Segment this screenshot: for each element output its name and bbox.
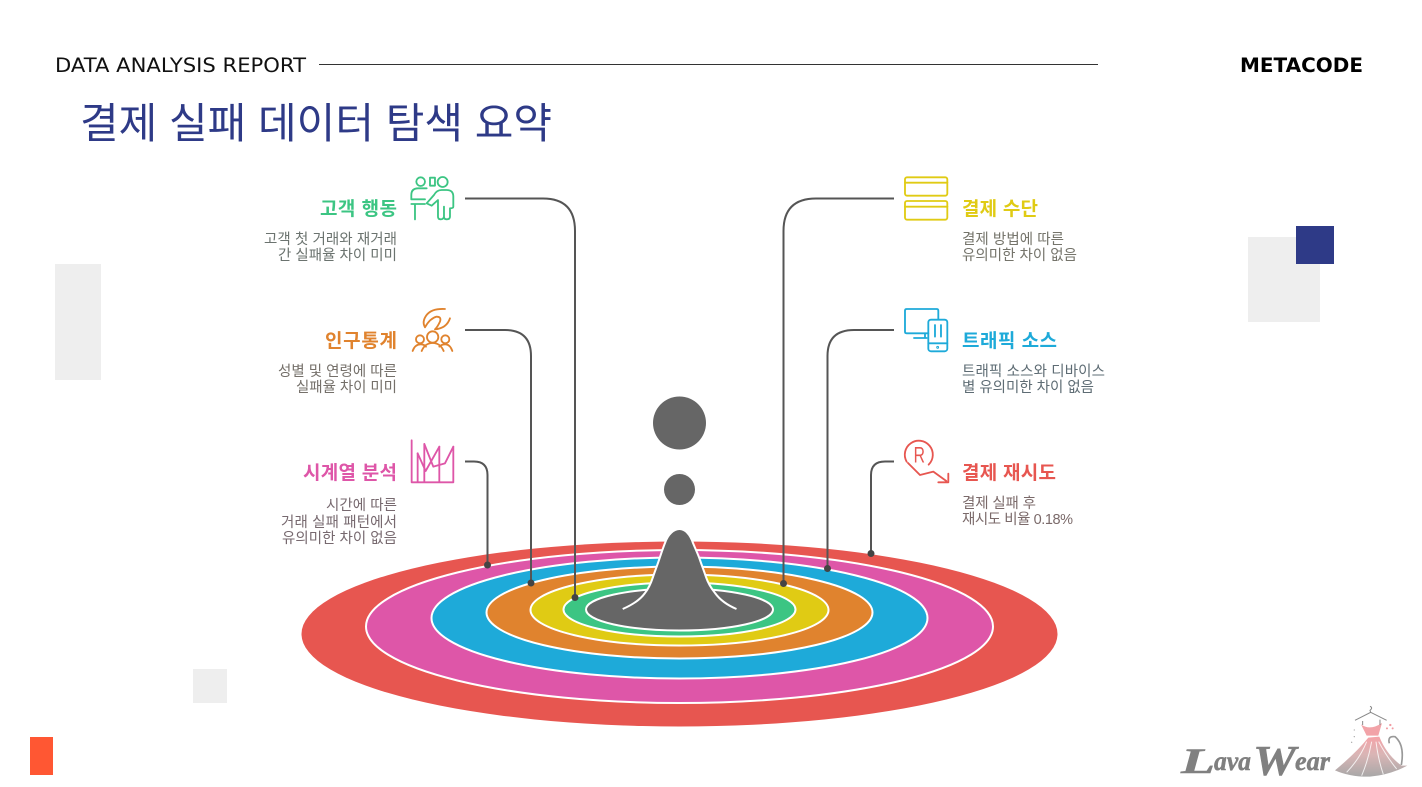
- decorative block: orange: [30, 737, 53, 775]
- title: 결제 실패 데이터 탐색 요약: [80, 100, 552, 147]
- description: 실패율 차이 미미: [296, 379, 397, 396]
- icon: line chart: [412, 440, 453, 482]
- description: 트래픽 소스와 디바이스: [962, 363, 1105, 380]
- concentric rings chart: [302, 542, 1058, 726]
- icon: retry arrow: R: [914, 442, 925, 467]
- logo wordmark: W: [1253, 739, 1299, 785]
- description: 거래 실패 패턴에서: [281, 514, 397, 531]
- description: [962, 363, 1105, 396]
- item: traffic source: [905, 309, 1105, 396]
- description: 유의미한 차이 없음: [282, 530, 397, 547]
- description: 성별 및 연령에 따른: [278, 363, 397, 380]
- item: time series: [281, 440, 453, 547]
- decorative block: left gray: [55, 264, 101, 380]
- description: 결제 방법에 따른: [962, 231, 1064, 248]
- header label: DATA ANALYSIS REPORT: [55, 54, 306, 77]
- logo: LavaWear: [1179, 706, 1407, 785]
- connector: payment retry: [868, 462, 894, 557]
- connector: traffic source: [824, 330, 894, 572]
- description: 별 유의미한 차이 없음: [962, 379, 1094, 396]
- small drop: [664, 474, 695, 505]
- description: 재시도 비율 0.18%: [962, 511, 1073, 528]
- description: 시간에 따른: [326, 497, 397, 514]
- central bell peak: [623, 529, 736, 625]
- description: [281, 497, 397, 547]
- item: customer behavior: [264, 177, 453, 264]
- decorative block: navy: [1296, 226, 1334, 264]
- description: 유의미한 차이 없음: [962, 247, 1077, 264]
- description: [278, 363, 397, 396]
- description: [962, 231, 1077, 264]
- icon: people group: [413, 309, 452, 351]
- connector: customer behavior: [465, 198, 578, 601]
- brand name: METACODE: [1240, 54, 1363, 77]
- heading: 트래픽 소스: [962, 330, 1057, 352]
- heading: 시계열 분석: [303, 462, 397, 484]
- logo wordmark: ear: [1295, 746, 1330, 776]
- description: 간 실패율 차이 미미: [278, 247, 397, 264]
- icon: cards: [905, 177, 947, 220]
- description: [962, 495, 1073, 528]
- decorative block: small gray: [193, 669, 227, 703]
- decorative block: right gray: [1248, 237, 1320, 322]
- connector: time series: [465, 462, 491, 568]
- description: 결제 실패 후: [962, 495, 1036, 512]
- description: [264, 231, 397, 264]
- icon: retry arrow: [905, 441, 948, 482]
- logo wordmark: [1179, 739, 1330, 785]
- heading: 결제 수단: [962, 198, 1038, 220]
- connector: payment method: [780, 198, 894, 587]
- heading: 인구통계: [325, 330, 397, 352]
- heading: 고객 행동: [320, 198, 397, 220]
- logo dress: [1335, 706, 1407, 777]
- logo wordmark: L: [1179, 741, 1215, 781]
- icon: presenter and person: [411, 177, 453, 219]
- logo wordmark: ava: [1214, 746, 1251, 776]
- heading: 결제 재시도: [962, 462, 1056, 484]
- item: payment method: [905, 177, 1077, 264]
- icon: monitor and phone: [905, 309, 947, 351]
- description: 고객 첫 거래와 재거래: [264, 231, 397, 248]
- connector: demographics: [465, 330, 534, 586]
- item: demographics: [278, 309, 452, 396]
- item: payment retry: [905, 441, 1073, 528]
- large drop: [653, 396, 706, 450]
